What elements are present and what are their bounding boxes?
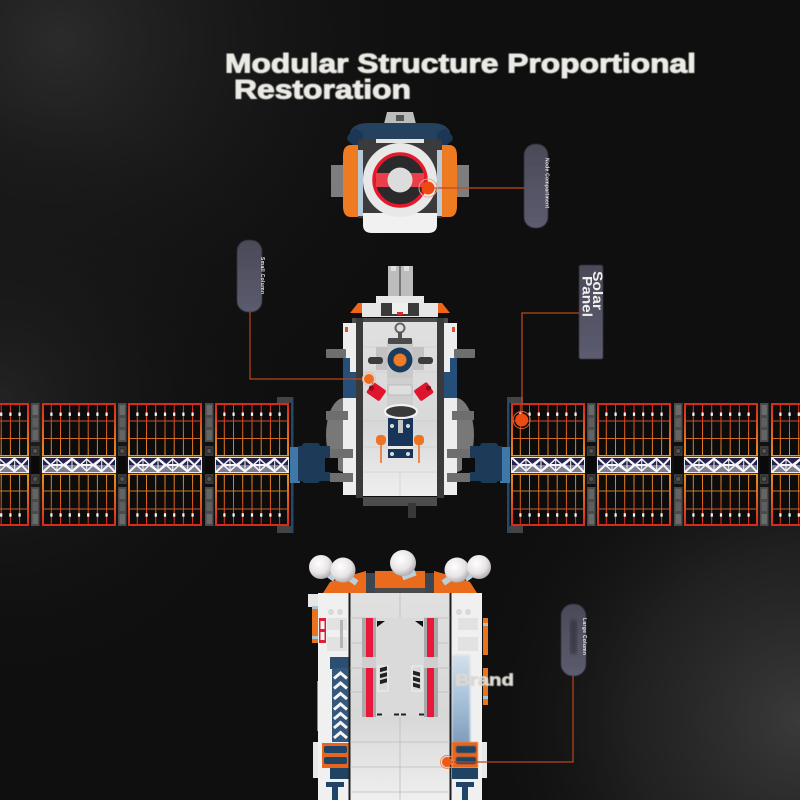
- label box: solar panel: [579, 265, 606, 359]
- label box: solar panel: Panel: [580, 276, 596, 317]
- brand mark: Brand: [455, 670, 514, 690]
- black markers: [377, 621, 385, 627]
- orange pegs: [376, 435, 386, 445]
- solar panel callout: [513, 313, 579, 428]
- label pill: small column: Small Column: [259, 257, 265, 294]
- astronaut domes: [309, 555, 333, 579]
- nozzle: [388, 266, 413, 300]
- top cap: [376, 296, 424, 304]
- chevron panel: [330, 657, 350, 669]
- side bays: [318, 593, 350, 800]
- astronaut collars: [322, 569, 478, 585]
- title: Restoration: [234, 74, 411, 104]
- left orange block: [322, 743, 350, 768]
- red bars: [362, 618, 376, 717]
- side pins and clamps: [326, 349, 475, 482]
- wheel: [385, 405, 417, 418]
- label pill: node compartment: [524, 144, 550, 228]
- left orange strip and tabs: [308, 594, 318, 607]
- title: Modular Structure Proportional: [225, 48, 696, 78]
- side brackets: [376, 347, 387, 370]
- eye hook: [396, 324, 404, 332]
- title: [225, 48, 696, 104]
- dark frame: [352, 318, 448, 323]
- label pill: large column: Large Column: [581, 618, 587, 655]
- large column callout: [440, 676, 573, 768]
- node compartment module: [331, 112, 469, 233]
- base: [363, 497, 437, 506]
- right blurred tube and block: [452, 655, 470, 743]
- side strips: [343, 323, 358, 495]
- label pill: node compartment: Node Compartment: [544, 158, 550, 208]
- centre body: [350, 593, 450, 800]
- large module: [308, 550, 491, 800]
- central module: [298, 266, 502, 518]
- navy plate: [388, 418, 413, 458]
- small column callout: [250, 312, 376, 386]
- label box: solar panel: Solar: [590, 271, 606, 311]
- label pill: small column: [237, 240, 265, 312]
- orange crown: [323, 571, 477, 593]
- label pill: large column: [561, 604, 587, 676]
- node compartment callout: [419, 179, 526, 197]
- solar wing: left: [0, 397, 300, 533]
- red tubes: [366, 382, 387, 402]
- centre panel: [363, 322, 437, 496]
- port: [388, 348, 412, 372]
- rear gray discs: [326, 398, 362, 472]
- solar wing: right: [500, 397, 800, 533]
- wing arms: [298, 443, 502, 483]
